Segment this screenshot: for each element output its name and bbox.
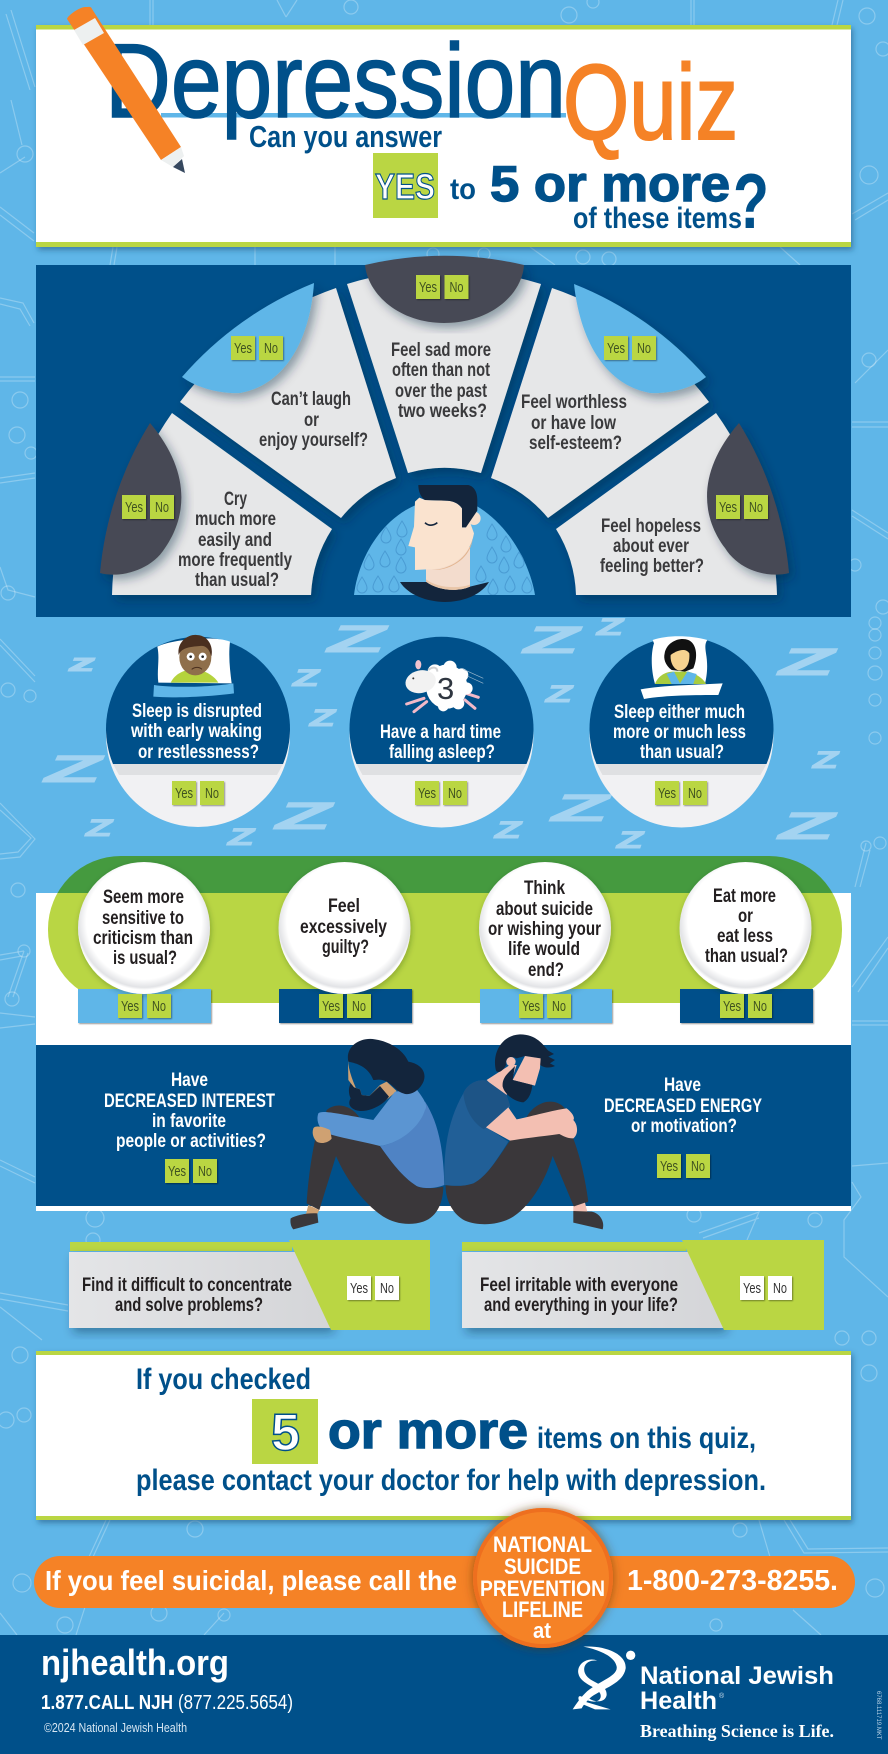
question: suicide: Think [524,878,565,899]
segment: hopeless: No [749,499,763,516]
question: decreased energy: Yes [660,1158,678,1175]
icon: woman in bed [641,636,723,699]
icon: counting sheep [403,660,483,712]
segment: cry [100,413,332,595]
question: guilty: excessively [300,917,387,938]
sleep circle: falling asleep: Yes [418,785,436,802]
figure: woman [290,1039,444,1229]
sleep circle: much more or less: more or much less [613,721,746,743]
question: decreased interest: Have [171,1069,208,1091]
segment: sad: over the past [395,381,488,402]
question: decreased interest: people or activities? [116,1130,266,1152]
segment: laugh: Yes [234,340,252,357]
badge: national suicide prevention lifeline [473,1508,613,1648]
segment: cry: Cry [224,489,247,510]
question: suicide: No [552,998,566,1015]
segment: worthless: No [637,340,651,357]
question: guilty [278,862,412,1023]
question: decreased interest: DECREASED INTEREST [104,1090,275,1112]
title: Depression: Depression [105,23,566,140]
question: sensitive: sensitive to [102,908,184,929]
decorative Z letters: Z [308,705,337,732]
question: decreased energy [604,1074,762,1178]
sleep circle: disrupted [106,635,290,827]
banner: suicide lifeline: 1-800-273-8255. [627,1565,838,1597]
question: decreased interest: in favorite [152,1110,226,1132]
segment: cry: more frequently [178,550,292,571]
panel: concentrate question: and solve problems? [115,1295,263,1316]
sleep circle: falling asleep [350,637,534,828]
panel: irritable question: and everything in your life? [484,1295,678,1316]
question: eating: Eat more [713,886,776,907]
panel: concentrate question: No [380,1280,394,1297]
sleep circle: disrupted: Yes [175,785,193,802]
sleep circle: disrupted: with early waking [130,720,262,742]
panel: decreased interest and energy [36,1045,851,1206]
subtitle: can you answer: Can you answer [249,119,442,154]
decorative Z letters: Z [493,817,523,844]
panel: green band with four question circles [36,856,851,1211]
decorative Z letters: Z [522,620,583,662]
question: suicide: or wishing your [488,919,601,940]
figure: man [444,1034,603,1229]
question: guilty: No [352,998,366,1015]
panel: irritable question: Yes [743,1280,761,1297]
number 5 box [252,1399,318,1464]
decorative Z letters: Z [550,788,612,830]
decorative Z letters [43,614,840,854]
panel: concentrate question: Yes [350,1280,368,1297]
segment: laugh: Can’t laugh [271,389,351,410]
decorative Z letters: Z [274,796,335,838]
panel: footer: ©2024 National Jewish Health [44,1721,187,1735]
segment: sad: two weeks? [398,401,487,422]
panel: result message: or more [328,1402,528,1459]
badge: national suicide prevention lifeline: PREVENTION [480,1576,605,1601]
badge: national suicide prevention lifeline: SUICIDE [504,1554,581,1579]
question: sensitive: Yes [121,998,139,1015]
title: Quiz: Quiz [563,42,738,162]
sleep circle: much more or less [590,636,774,828]
segment: cry: than usual? [195,570,279,591]
subtitle: of these items: of these items [573,202,742,235]
sleep circle: falling asleep: Have a hard time [380,721,501,743]
panel: footer: ® [719,1692,725,1700]
segment: worthless [491,284,709,518]
panel: irritable question: No [773,1280,787,1297]
segment: laugh [180,283,396,518]
question: suicide: about suicide [496,899,593,920]
sleep circle: falling asleep: falling asleep? [389,741,495,763]
decorative Z letters: Z [777,642,838,684]
question: sensitive [78,862,211,1023]
segment: sad: Feel sad more [391,340,491,361]
panel: fan of mood questions [36,256,851,617]
segment: sad: Yes [419,279,437,296]
segment: hopeless: feeling better? [600,556,704,577]
panel: footer [0,1635,888,1754]
segment: laugh: enjoy yourself? [259,430,368,451]
sleep circle: much more or less: No [688,785,702,802]
segment: cry: easily and [198,530,272,551]
question: guilty: Feel [328,896,360,917]
panel: footer: njhealth.org [41,1642,229,1683]
illustration: sad man with raindrops [352,485,538,607]
panel: title [36,7,851,247]
question: decreased energy: or motivation? [631,1115,737,1137]
question: eating: Yes [723,998,741,1015]
decorative Z letters: Z [43,749,105,791]
icon: pencil [67,7,185,173]
segment: cry: much more [195,509,276,530]
badge: national suicide prevention lifeline: NATIONAL [493,1532,592,1557]
question: sensitive: is usual? [113,948,177,969]
segment: worthless: self-esteem? [529,433,622,454]
question: sensitive: criticism than [93,928,193,949]
question: guilty: Yes [322,998,340,1015]
panel: concentrate question: Find it difficult to concentrate [82,1275,292,1296]
question: suicide [479,862,612,1023]
segment: sad: often than not [392,360,491,381]
question: guilty: guilty? [322,937,369,958]
decorative Z letters: Z [811,747,840,774]
sleep circle: disrupted: Sleep is disrupted [132,700,262,722]
segment: sad [347,256,541,473]
question: suicide: end? [528,960,564,981]
question: decreased interest [104,1069,275,1183]
question: suicide: Yes [522,998,540,1015]
badge: national suicide prevention lifeline: at [533,1618,551,1643]
question: eating: No [753,998,767,1015]
illustration: two people sitting back to back [290,1034,603,1229]
decorative Z letters: z [67,650,95,677]
panel: concentrate question [69,1240,430,1330]
panel: result message: please contact your doctor for help with depression. [136,1464,766,1497]
question: decreased energy: DECREASED ENERGY [604,1095,762,1117]
question: eating [680,862,813,1023]
segment: cry: No [155,499,169,516]
decorative Z letters: Z [84,815,114,842]
panel: result message: If you checked [136,1363,311,1396]
question: decreased energy: No [691,1158,705,1175]
badge: national suicide prevention lifeline: LIFELINE [502,1597,583,1622]
segment: laugh: or [304,410,319,431]
subtitle: to: to [450,173,476,206]
segment: hopeless: Yes [719,499,737,516]
question mark: ? [733,157,769,245]
banner: suicide lifeline: If you feel suicidal, please call the [45,1565,457,1596]
segment: hopeless: about ever [613,536,689,557]
icon: wide-eyed man in bed [153,635,234,697]
question: sensitive: Seem more [103,887,184,908]
sleep circle: falling asleep: 3 [437,671,454,706]
sleep circle: falling asleep: No [448,785,462,802]
decorative Z letters: Z [615,827,645,854]
panel: footer: 6768.111719.MKT [875,1691,881,1740]
segment: hopeless: Feel hopeless [601,516,701,537]
segment: worthless: Yes [607,340,625,357]
decorative Z letters: Z [226,824,256,851]
segment: sad: No [450,279,464,296]
panel: footer: 1.877.CALL NJH [41,1692,173,1714]
question: eating: eat less [717,926,773,947]
logo: National Jewish Health ribbon [573,1646,635,1709]
panel: result message: items on this quiz, [537,1422,756,1455]
panel: footer: (877.225.5654) [178,1692,293,1714]
YES box [373,153,438,218]
decorative Z letters: Z [326,619,389,661]
panel: irritable question: Feel irritable with everyone [480,1275,678,1296]
segment: worthless: Feel worthless [521,392,627,413]
decorative Z letters: Z [544,681,574,708]
number 5 box: 5 [271,1404,300,1462]
banner: suicide lifeline [34,1508,855,1648]
subtitle: 5 or more: 5 or more [490,156,730,212]
sleep circle: disrupted: No [205,785,219,802]
title underline [161,113,566,118]
question: sensitive: No [152,998,166,1015]
YES box: YES [375,166,435,207]
question: suicide: life would [508,939,580,960]
segment: worthless: or have low [531,413,616,434]
question: eating: than usual? [705,946,788,967]
panel: footer: Breathing Science is Life. [640,1721,834,1741]
decorative Z letters: Z [291,665,321,692]
panel: result message [36,1351,851,1520]
question: decreased interest: Yes [168,1163,186,1180]
sleep circle: much more or less: Yes [658,785,676,802]
question: decreased energy: Have [664,1074,701,1096]
panel: irritable question [462,1240,824,1330]
sleep circle: disrupted: or restlessness? [138,741,259,763]
segment: laugh: No [264,340,278,357]
sleep circle: much more or less: than usual? [640,741,724,763]
decorative Z letters: Z [777,806,838,848]
sleep circle: much more or less: Sleep either much [614,701,745,723]
decorative Z letters: Z [595,614,625,641]
panel: footer: National Jewish [640,1662,834,1690]
panel: footer: Health [640,1687,717,1715]
question: decreased interest: No [198,1163,212,1180]
segment: hopeless [556,413,789,595]
segment: cry: Yes [125,499,143,516]
question: eating: or [738,906,753,927]
